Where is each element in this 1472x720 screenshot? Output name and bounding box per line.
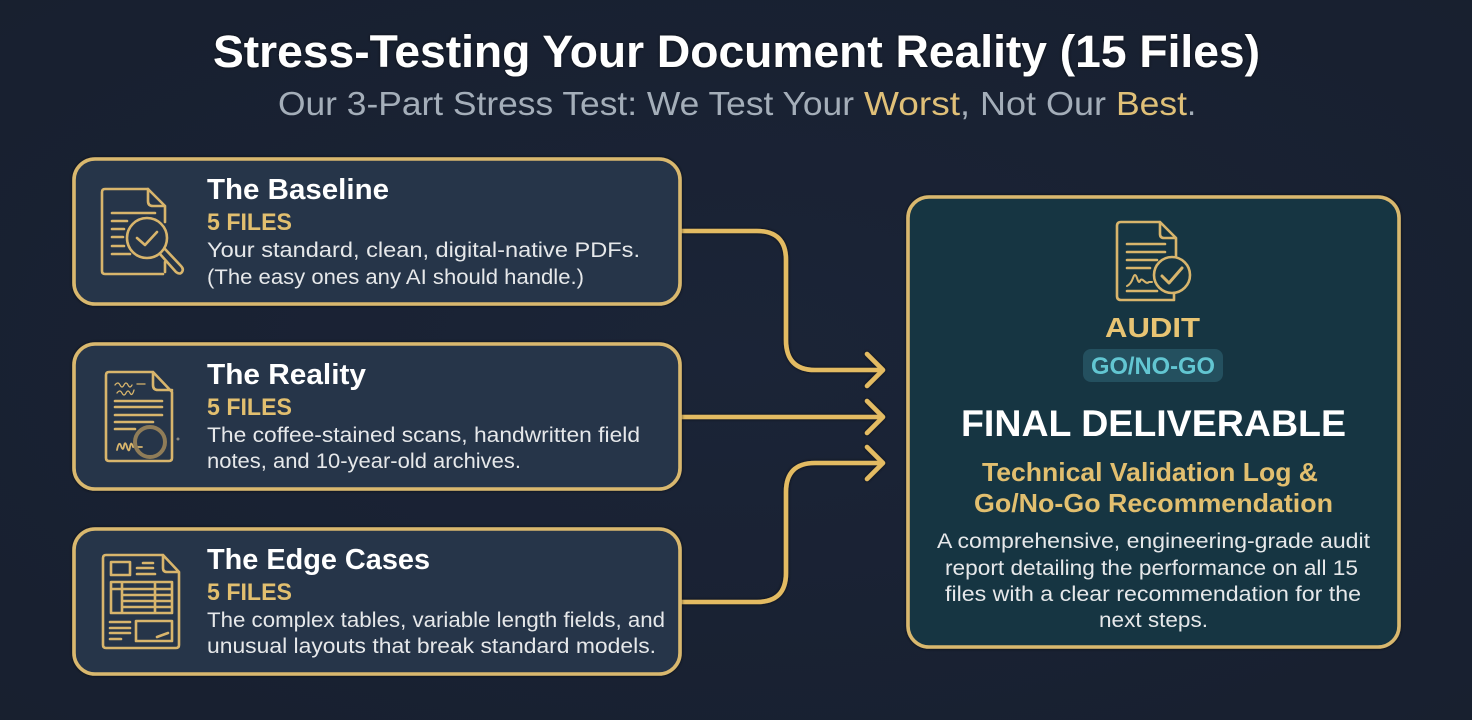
description: [207, 423, 640, 473]
arrow: baseline to deliverable: [682, 231, 883, 386]
file count: 5 FILES: [207, 394, 292, 421]
deliverable description: files with a clear recommendation for the: [945, 582, 1361, 606]
icon: coffee-stained document: [106, 372, 180, 461]
subtitle: Our 3-Part Stress Test: We Test Your: [278, 85, 854, 122]
go/no-go badge: GO/NO-GO: [1091, 353, 1215, 380]
description: The coffee-stained scans, handwritten field: [207, 423, 640, 447]
icon: complex table document: [103, 555, 179, 648]
panel: the baseline: [74, 159, 680, 304]
heading: The Reality: [207, 359, 366, 391]
arrow: reality to deliverable: [682, 401, 883, 433]
deliverable subtitle: Technical Validation Log &: [982, 457, 1318, 487]
heading: FINAL DELIVERABLE: [961, 403, 1346, 444]
icon: audit document with check: [1117, 222, 1190, 300]
panel: final deliverable: [908, 197, 1399, 647]
subtitle: .: [1187, 85, 1196, 122]
deliverable description: next steps.: [1099, 608, 1208, 632]
description: notes, and 10-year-old archives.: [207, 449, 521, 473]
deliverable description: report detailing the performance on all 15: [945, 556, 1358, 580]
subtitle: Worst: [864, 85, 960, 122]
icon: document with magnifier: [102, 189, 183, 274]
deliverable subtitle: Go/No-Go Recommendation: [974, 488, 1333, 518]
panel: the reality: [74, 344, 680, 489]
description: [207, 238, 640, 289]
description: (The easy ones any AI should handle.): [207, 265, 584, 289]
file count: 5 FILES: [207, 209, 292, 236]
subtitle: [278, 85, 1196, 122]
file count: 5 FILES: [207, 579, 292, 606]
subtitle: Best: [1116, 85, 1187, 122]
title: Stress-Testing Your Document Reality (15 Files): [213, 26, 1260, 77]
heading: The Baseline: [207, 174, 389, 206]
description: unusual layouts that break standard models.: [207, 634, 656, 658]
deliverable description: A comprehensive, engineering-grade audit: [937, 529, 1370, 553]
audit label: AUDIT: [1105, 312, 1200, 343]
panel: the edge cases: [74, 529, 680, 674]
description: Your standard, clean, digital-native PDFs.: [207, 238, 640, 262]
arrow: edge cases to deliverable: [682, 447, 883, 602]
description: The complex tables, variable length fields, and: [207, 608, 665, 632]
heading: The Edge Cases: [207, 544, 430, 576]
deliverable subtitle: [974, 457, 1333, 518]
deliverable description: [937, 529, 1370, 632]
subtitle: , Not Our: [960, 85, 1106, 122]
description: [207, 608, 665, 658]
